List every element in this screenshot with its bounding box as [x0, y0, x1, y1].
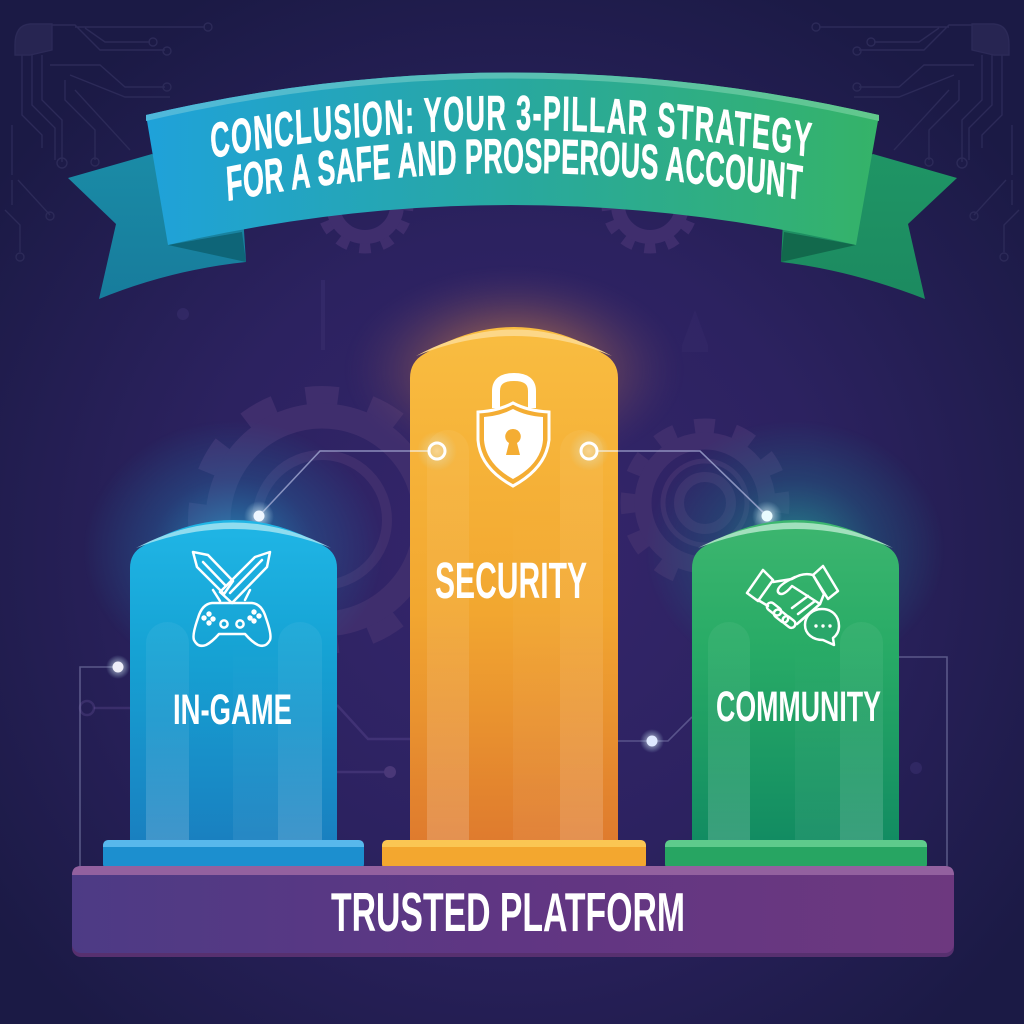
circuit nodes on security pillar [410, 431, 618, 471]
ribbon folds [168, 232, 856, 262]
circuit traces background [5, 23, 1019, 261]
label: trusted platform: TRUSTED PLATFORM [331, 881, 685, 943]
title: CONCLUSION: YOUR 3-PILLAR STRATEGY [211, 95, 812, 158]
background gears [197, 162, 782, 645]
ribbon front [146, 72, 879, 245]
connector lines and nodes [80, 451, 947, 866]
ribbon highlight [146, 72, 879, 121]
label: in-game: IN-GAME [173, 686, 292, 734]
title [211, 95, 812, 201]
title: FOR A SAFE AND PROSPEROUS ACCOUNT [226, 138, 804, 201]
pillar: community [692, 520, 899, 840]
base step: orange [382, 840, 646, 870]
icon: crossed swords and gamepad [193, 552, 270, 646]
icon: padlock shield [478, 377, 549, 486]
platform [72, 866, 954, 957]
base step: blue [103, 840, 364, 870]
label: security: SECURITY [435, 552, 587, 609]
base step: green [665, 840, 927, 870]
right ribbon tail [781, 154, 957, 299]
pillar: in-game [130, 520, 337, 840]
pillar glows [83, 265, 945, 680]
icon: handshake with speech bubble [747, 566, 839, 645]
faint background marks [177, 280, 922, 774]
left ribbon tail [68, 154, 246, 299]
pillar: security [410, 327, 618, 840]
label: community: COMMUNITY [716, 683, 881, 731]
ribbon banner [68, 72, 957, 340]
